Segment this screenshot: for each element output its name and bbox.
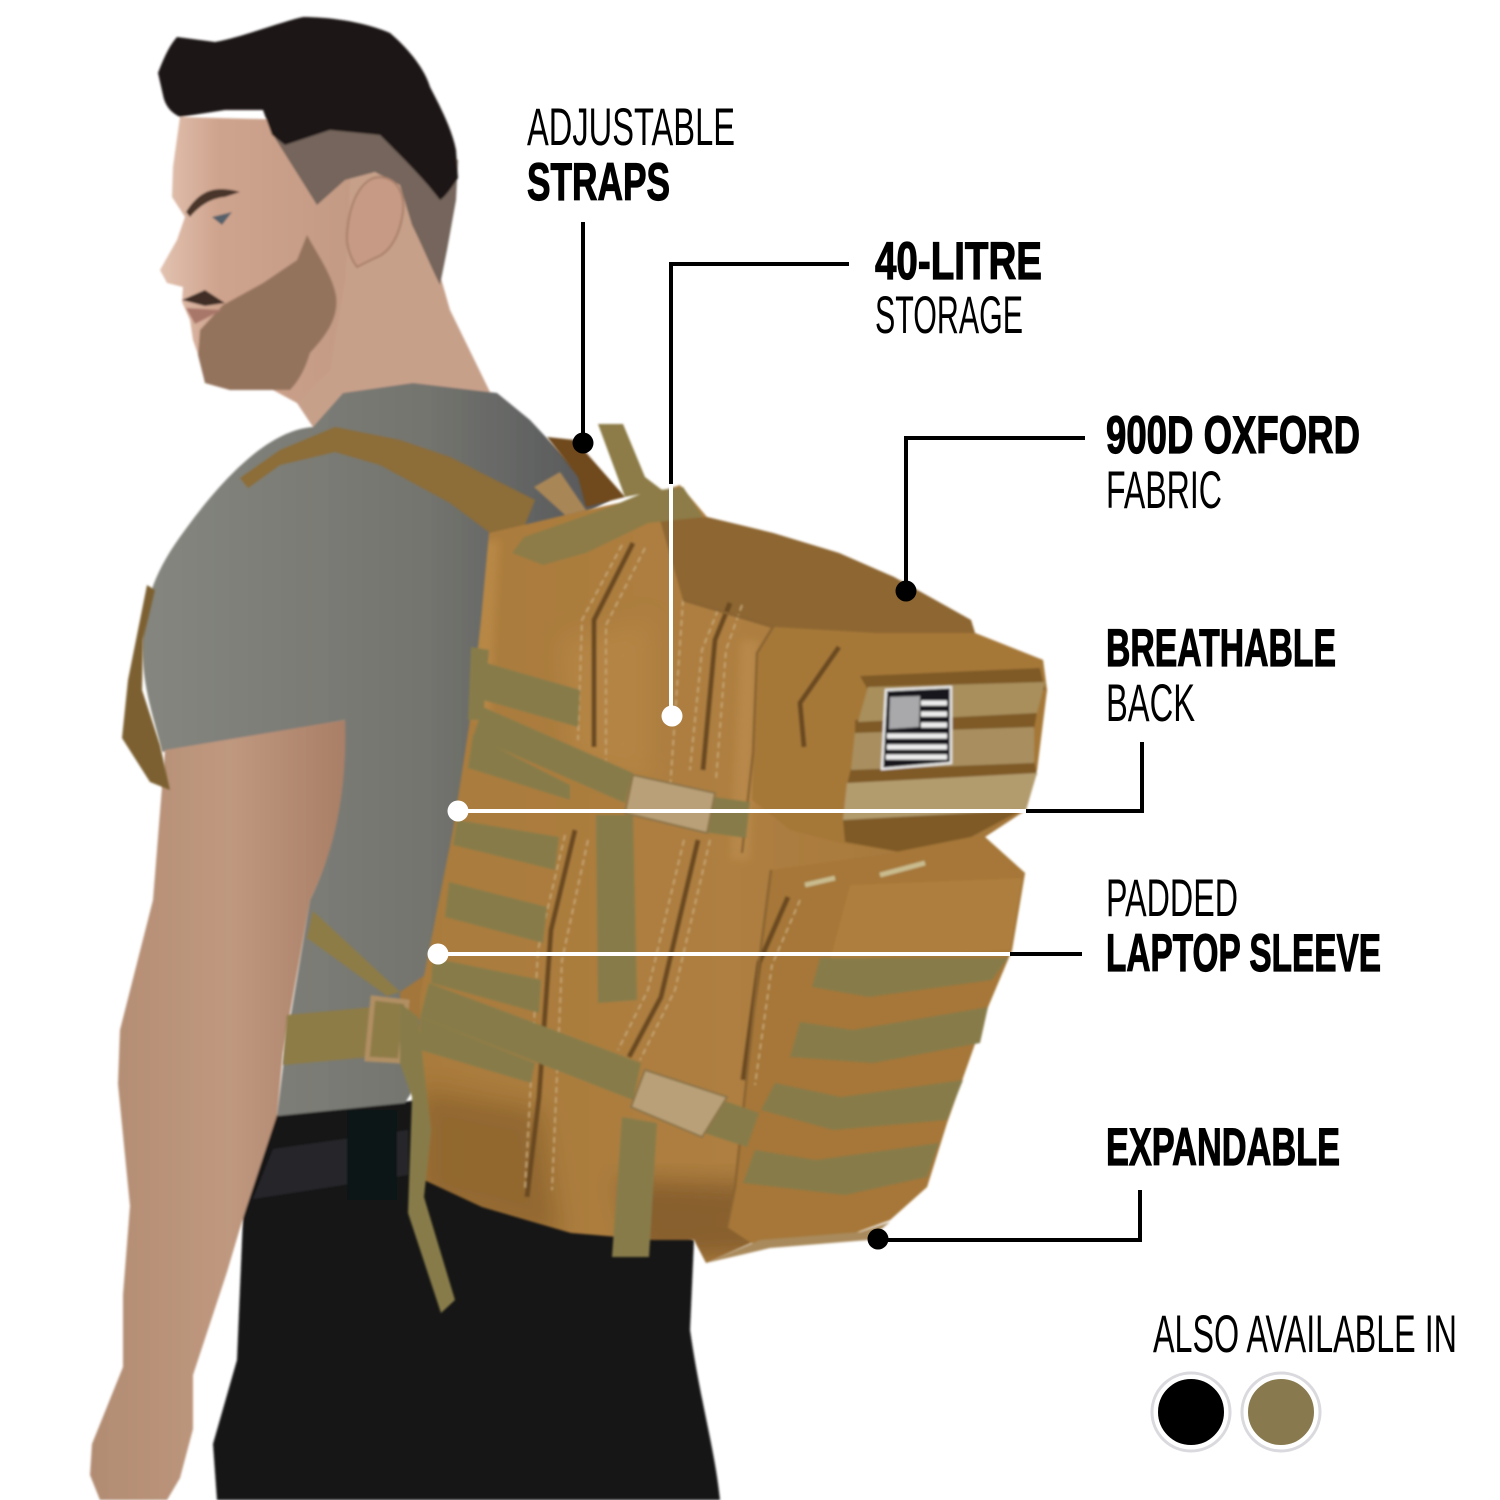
callout: 900D oxford fabric: FABRIC [1106,461,1222,520]
zippers [527,543,839,1197]
bag flap at waist [400,965,440,1030]
stitching [525,545,800,1190]
top handle patch [512,487,703,565]
belt loop [347,1110,397,1200]
panel edges [683,600,773,1227]
man wearing backpack [90,17,720,1500]
velcro strip top [858,682,1045,722]
swatch ring: black [1152,1373,1230,1451]
flag patch [882,687,951,769]
hair [158,17,458,200]
dark back-strap [547,437,625,507]
lower pocket [727,837,1025,1243]
callout: breathable back: BACK [1106,674,1195,733]
top handle strap [598,424,662,497]
strap right of upper buckle [703,797,750,838]
strap right of lower buckle [704,1100,759,1147]
eyebrow [186,189,240,217]
callout: padded laptop sleeve [428,869,1381,983]
pocket strap 1 [812,958,1008,997]
colour options [1152,1305,1457,1451]
moustache [182,290,225,306]
swatch: black [1156,1377,1226,1447]
top pocket [752,627,1047,853]
pocket strap 2 [790,1007,988,1063]
side strap pieces upper [468,647,580,800]
callout: 40-litre storage [662,232,1042,726]
lips [186,308,222,324]
swatch ring: olive [1242,1373,1320,1451]
vertical strap upper [596,815,637,1003]
lower buckle [631,1070,727,1137]
pocket strap 3 [761,1080,963,1130]
callout: 900D oxford fabric: 900D OXFORD [1106,406,1360,465]
eye [212,212,232,225]
callout: expandable [868,1118,1340,1250]
pocket shadow bands [843,668,1045,853]
callout: 900D oxford fabric [896,406,1360,602]
velcro strip middle [851,727,1034,770]
velcro strip bottom [843,773,1037,820]
callout: adjustable straps: STRAPS [527,153,670,212]
waist buckle [367,998,407,1061]
neck [273,170,490,427]
vertical strap lower [612,1117,657,1257]
arm and hand [90,720,345,1500]
compression strap upper [473,707,633,803]
shading clipped to bag [420,540,930,1260]
shoulder harness [240,427,535,533]
swatch: olive [1246,1377,1316,1447]
main body [418,485,1047,1263]
belt [253,1130,408,1199]
mesh back panel [432,800,476,985]
backpack [122,424,1047,1313]
callout: expandable: EXPANDABLE [1106,1118,1340,1177]
callout: breathable back [448,619,1336,822]
rear harness strap [122,585,170,790]
waist diagonal strap [307,911,400,996]
side strap lower [420,1017,535,1083]
face [160,117,350,403]
tan slider [534,472,586,515]
callout: breathable back: BREATHABLE [1106,619,1336,678]
cords [805,863,925,885]
shirt [142,383,610,1116]
hair fade [273,120,458,285]
lower pocket shade [830,878,1022,960]
callout: 40-litre storage: STORAGE [875,286,1023,345]
callout: adjustable straps [527,98,735,454]
callout: padded laptop sleeve: PADDED [1106,869,1238,928]
waist horizontal strap [283,1007,373,1065]
upper buckle [625,775,715,833]
callout: adjustable straps: ADJUSTABLE [527,98,735,157]
beard [198,235,337,390]
top face [660,517,975,633]
side strap pieces middle [431,820,559,1013]
pocket strap 4 [743,1143,939,1195]
trousers [213,1100,720,1500]
callout: 40-litre storage: 40-LITRE [875,232,1042,291]
compression strap lower [420,983,641,1100]
ear [347,177,403,267]
hanging strap [400,1003,455,1313]
bottom tabs [706,1222,890,1263]
